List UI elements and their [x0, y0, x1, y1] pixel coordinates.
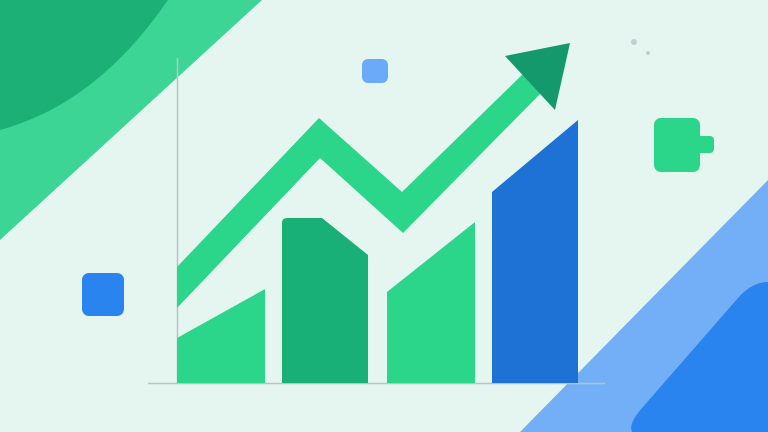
bar 3 [387, 222, 475, 383]
icon: blue square left [82, 273, 124, 316]
dots [631, 39, 650, 55]
icon: small blue square [362, 59, 388, 83]
decoration: top-left green shapes [0, 0, 262, 240]
axis: vertical [176, 58, 178, 383]
bar 4 [492, 120, 578, 383]
icon: green puzzle square [654, 118, 714, 172]
bar 2 [282, 218, 368, 383]
bar 1 [177, 289, 265, 383]
decoration: bottom-right blue shapes [520, 180, 768, 432]
trend arrow band [177, 72, 542, 308]
axis: horizontal [148, 382, 605, 384]
arrow head [505, 43, 570, 110]
